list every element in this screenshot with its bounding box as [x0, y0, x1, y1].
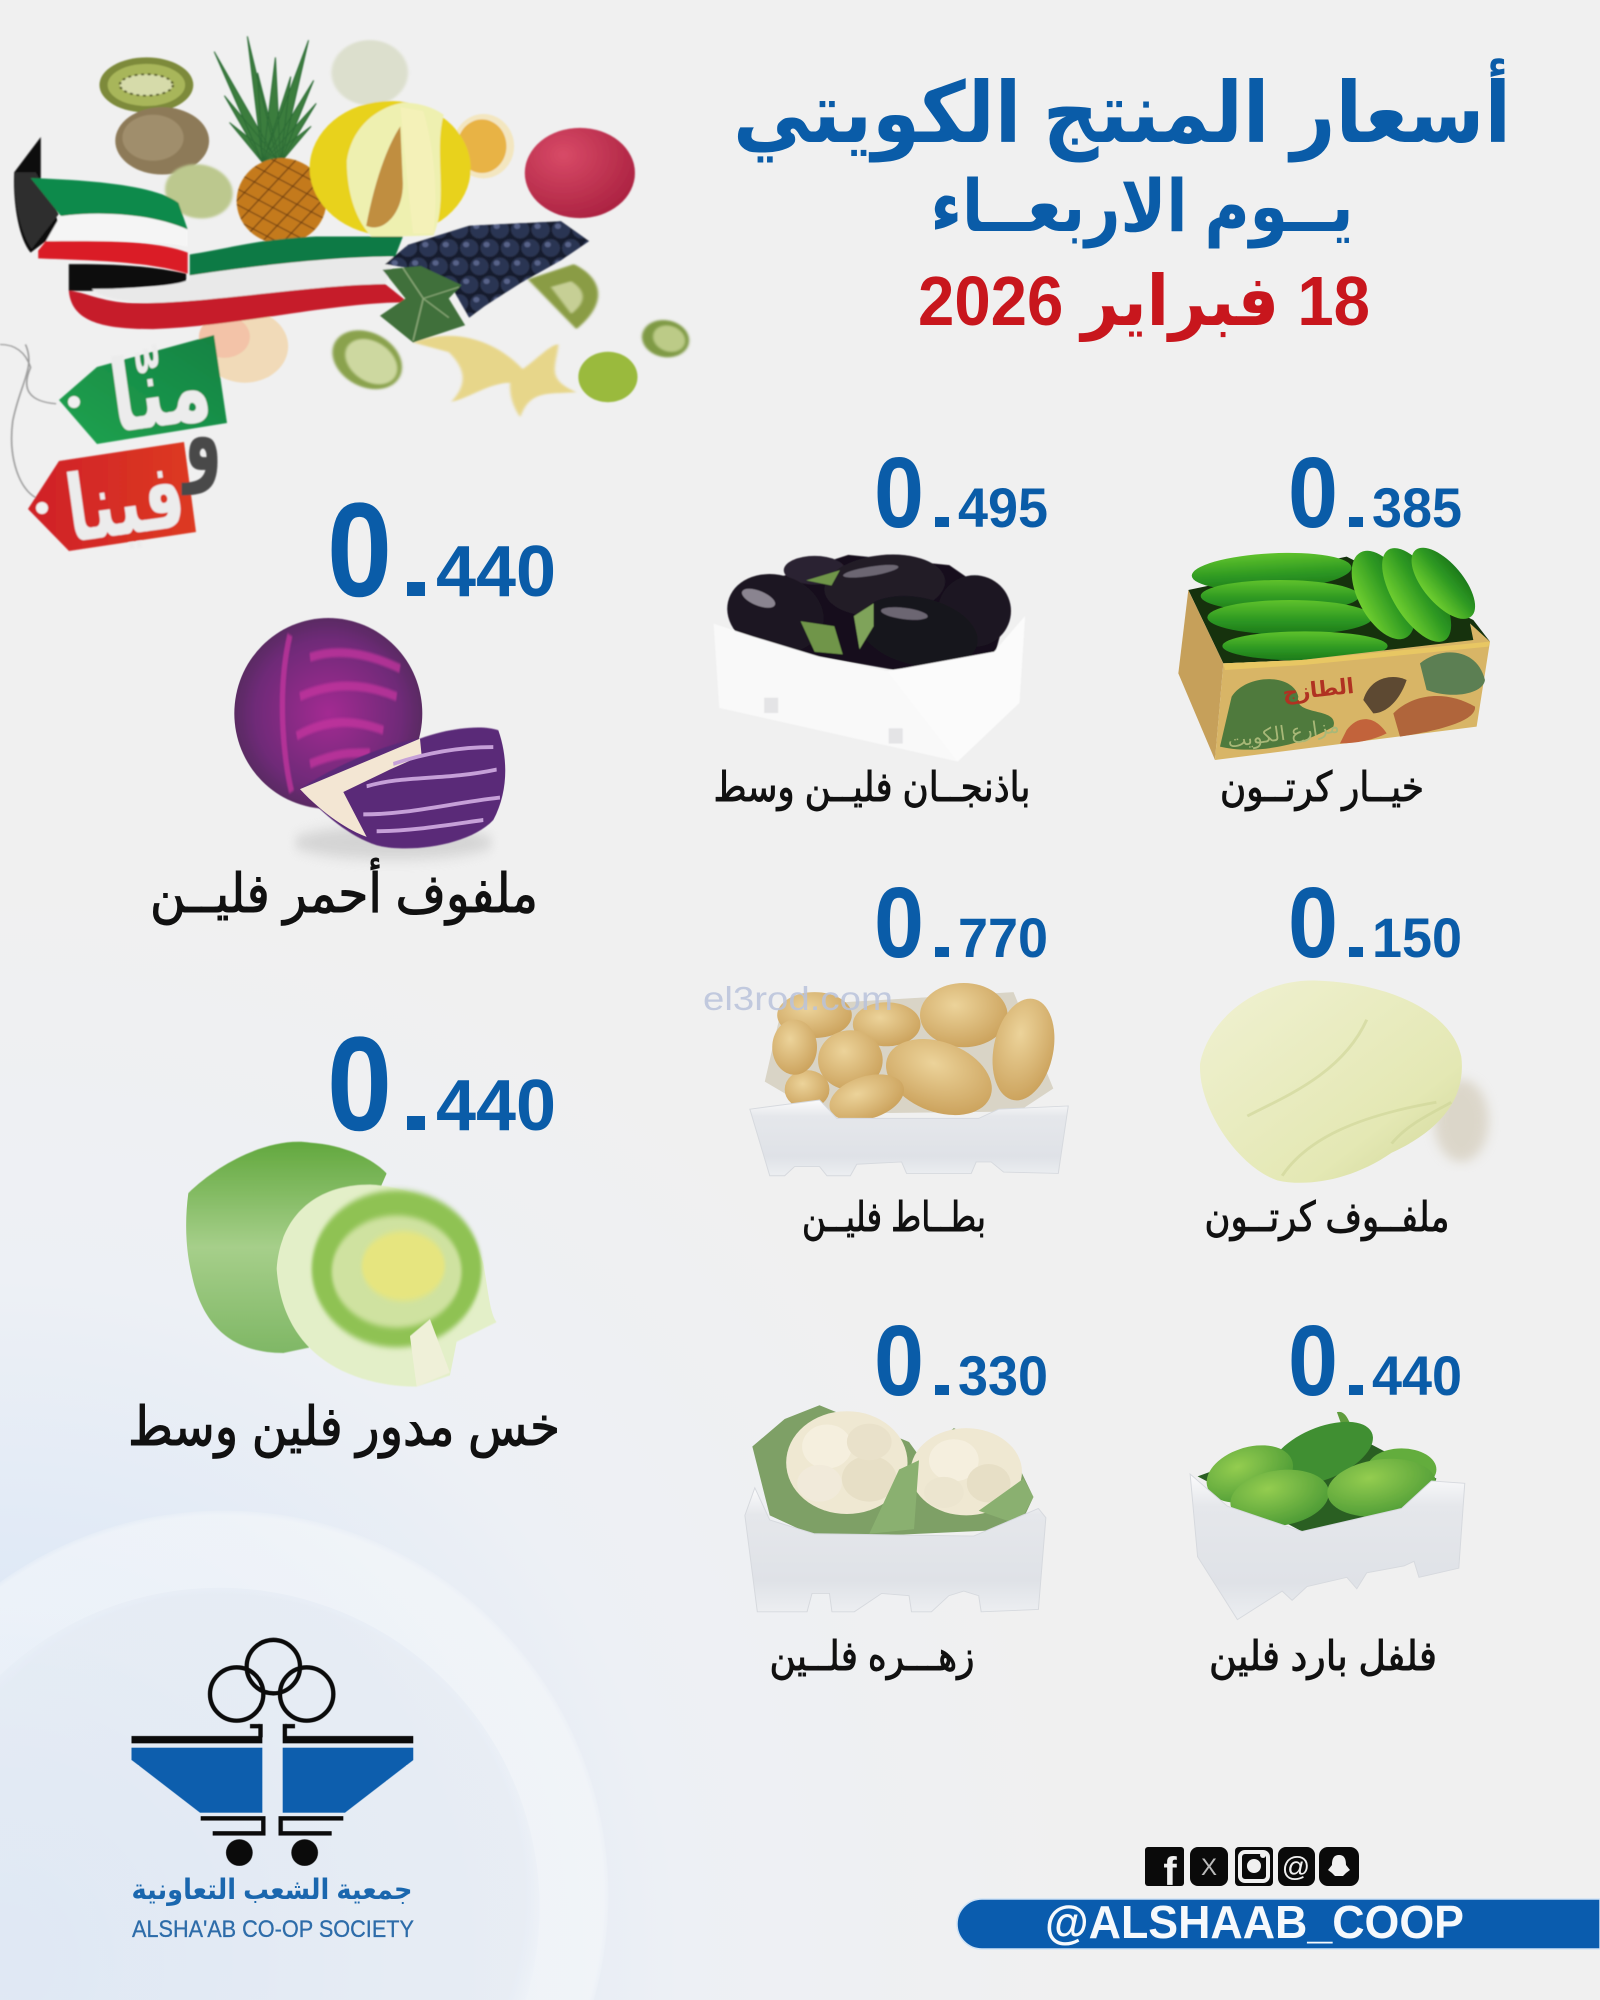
icon: snapchat — [1319, 1847, 1359, 1886]
price: 0 — [1288, 437, 1338, 549]
image — [1200, 981, 1489, 1183]
price: 330 — [958, 1344, 1048, 1407]
illustration: fruits, Kuwaiti flag ribbon and tags — [0, 36, 698, 562]
price: 440 — [1372, 1344, 1462, 1407]
price — [327, 1010, 556, 1159]
price: 440 — [436, 532, 556, 612]
price: 0 — [1288, 1305, 1338, 1417]
price: 495 — [958, 476, 1048, 539]
title — [733, 58, 1511, 342]
Kuwaiti flag ribbon — [14, 137, 408, 329]
green tag — [59, 329, 227, 454]
price — [874, 437, 1048, 549]
image — [234, 618, 505, 859]
image: الطازج — [1281, 674, 1355, 706]
product: potato foam — [750, 867, 1068, 1241]
image — [186, 1142, 497, 1387]
icon: facebook — [1145, 1847, 1184, 1894]
price: 0 — [874, 867, 924, 979]
product: cucumber carton — [1178, 437, 1490, 811]
label: خيــار كرتــون — [1220, 764, 1424, 811]
image — [1190, 1409, 1465, 1620]
red tag: فينا — [60, 444, 191, 562]
price: 440 — [436, 1066, 556, 1146]
product: green pepper foam — [1190, 1305, 1465, 1680]
image: مزارع الكويت — [1226, 715, 1341, 753]
icon: threads — [1278, 1847, 1315, 1886]
product: cauliflower foam — [745, 1305, 1048, 1680]
icon: X — [1190, 1847, 1228, 1886]
price — [1288, 437, 1462, 549]
icon: instagram — [1235, 1847, 1273, 1886]
logo: Alshaab Co-op Society — [132, 1640, 414, 1943]
price: 0 — [1288, 867, 1338, 979]
label: باذنجــان فليــن وسط — [714, 764, 1030, 811]
watermark: el3rod.com — [703, 980, 893, 1017]
product: red cabbage foam — [150, 476, 556, 925]
price: 0 — [327, 476, 392, 625]
price — [874, 867, 1048, 979]
red tag — [28, 442, 196, 562]
grapes and leaf — [380, 221, 589, 343]
strings — [0, 344, 56, 498]
social icons — [1145, 1847, 1359, 1894]
image — [750, 983, 1068, 1176]
label: خس مدور فلين وسط — [128, 1397, 560, 1458]
price: 0 — [327, 1010, 392, 1159]
icon: facebook: f — [1163, 1850, 1177, 1894]
price: 385 — [1372, 476, 1462, 539]
product: round lettuce foam — [128, 1010, 560, 1458]
title: أسعار المنتج الكويتي — [733, 58, 1511, 163]
product: white cabbage carton — [1200, 867, 1489, 1241]
image — [1178, 537, 1490, 760]
product: eggplant foam — [713, 437, 1048, 811]
label: فلفل بارد فلين — [1209, 1633, 1437, 1680]
image — [713, 549, 1025, 761]
green tag: منّا — [103, 329, 218, 454]
image — [745, 1405, 1046, 1612]
price — [1288, 1305, 1462, 1417]
title: date: 18 فبراير 2026 — [918, 262, 1370, 342]
price — [327, 476, 556, 625]
logo English name: ALSHA'AB CO-OP SOCIETY — [132, 1916, 414, 1943]
label: بطــاط فليــن — [802, 1194, 986, 1241]
price: 150 — [1372, 906, 1462, 969]
price — [874, 1305, 1048, 1417]
logo Arabic name: جمعية الشعب التعاونية — [132, 1874, 412, 1906]
label: زهـــره فلــين — [770, 1633, 974, 1680]
icon: X: X — [1201, 1854, 1217, 1881]
title: day: يــوم الاربعــاء — [930, 167, 1354, 249]
logo mark — [132, 1640, 413, 1866]
price: 0 — [874, 437, 924, 549]
handle bar — [957, 1896, 1600, 1949]
price: 770 — [958, 906, 1048, 969]
fruit cluster — [99, 36, 698, 417]
icon: threads: @ — [1282, 1851, 1310, 1882]
price — [1288, 867, 1462, 979]
handle bar: @ALSHAAB_COOP — [1045, 1896, 1464, 1948]
price: 0 — [874, 1305, 924, 1417]
conjunction: و — [181, 377, 222, 496]
label: ملفــوف كرتــون — [1204, 1194, 1450, 1241]
label: ملفوف أحمر فليــن — [150, 858, 538, 925]
